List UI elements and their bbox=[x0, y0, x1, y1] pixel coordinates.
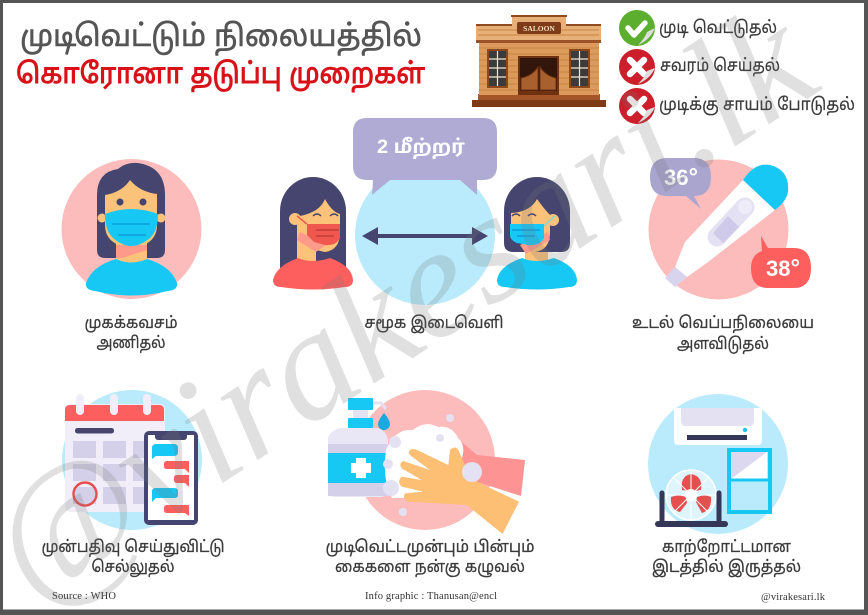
line 1: காற்றோட்டமான bbox=[662, 538, 791, 557]
label: wash hands bbox=[326, 538, 534, 578]
label: wear mask bbox=[84, 314, 178, 353]
bubble: 38 degrees bbox=[751, 236, 811, 288]
icon: calendar and phone bbox=[62, 390, 202, 530]
site handle: @virakesari.lk bbox=[761, 592, 826, 603]
infographic credit: Info graphic : Thanusan@encl bbox=[365, 591, 497, 602]
legend: allowed and banned services bbox=[619, 10, 855, 124]
line 2: கைகளை நன்கு கழுவல் bbox=[335, 558, 525, 578]
arrow: two-way distance bbox=[362, 227, 488, 245]
footer credits bbox=[52, 591, 826, 603]
line 1: முகக்கவசம் bbox=[84, 314, 178, 333]
icon: blue circle bbox=[355, 165, 495, 305]
title line 2: கொரோனா தடுப்பு முறைகள் bbox=[16, 58, 425, 92]
icon: saloon building bbox=[472, 15, 606, 107]
icon: red cross shave bbox=[619, 49, 655, 85]
bubble: 38 degrees: 38° bbox=[766, 255, 800, 282]
icon: left woman red mask bbox=[273, 177, 353, 290]
panel: hand washing bbox=[326, 390, 534, 578]
legend text: shaving: சவரம் செய்தல் bbox=[660, 56, 780, 76]
icon: saloon building: SALOON bbox=[523, 24, 555, 33]
line 2: அணிதல் bbox=[96, 334, 166, 353]
panel: booking bbox=[42, 390, 224, 578]
label: well ventilated place bbox=[652, 538, 801, 578]
bubble: 36 degrees: 36° bbox=[664, 164, 698, 191]
icon: woman wearing mask bbox=[62, 159, 202, 299]
line 1: உடல் வெப்பநிலையை bbox=[632, 314, 814, 333]
line 2: இடத்தில் இருத்தல் bbox=[652, 558, 801, 578]
legend text: haircut: முடி வெட்டுதல் bbox=[659, 18, 777, 39]
panel: temperature check bbox=[632, 158, 814, 355]
panel: face mask bbox=[62, 159, 202, 353]
source: Source : WHO bbox=[52, 591, 116, 602]
icon: red cross dye bbox=[619, 88, 655, 124]
panel: ventilation bbox=[648, 394, 801, 578]
speech bubble: 2 metres: 2 மீற்றர் bbox=[377, 137, 465, 159]
title bbox=[16, 20, 425, 92]
icon: soap bottle and washing hands bbox=[328, 390, 525, 534]
label: measure temperature bbox=[632, 314, 814, 355]
line 2: அளவிடுதல் bbox=[677, 335, 769, 355]
icon: thermometer bbox=[648, 160, 788, 300]
speech bubble: 2 metres bbox=[353, 118, 497, 195]
label: book before visiting bbox=[42, 538, 224, 578]
legend text: hair dye: முடிக்கு சாயம் போடுதல் bbox=[659, 95, 855, 116]
line 1: முடிவெட்டமுன்பும் பின்பும் bbox=[326, 538, 534, 557]
line 1: முன்பதிவு செய்துவிட்டு bbox=[42, 538, 224, 558]
bubble: 36 degrees bbox=[650, 158, 711, 209]
icon: green check bbox=[619, 10, 655, 46]
icon: right woman blue mask bbox=[497, 177, 577, 290]
panel: social distance bbox=[273, 118, 577, 334]
line 2: செல்லுதல் bbox=[92, 558, 174, 578]
icon: air conditioner, window and fan bbox=[648, 394, 788, 534]
title line 1: முடிவெட்டும் நிலையத்தில் bbox=[20, 20, 422, 56]
label: social distance: சமூக இடைவெளி bbox=[364, 314, 504, 334]
